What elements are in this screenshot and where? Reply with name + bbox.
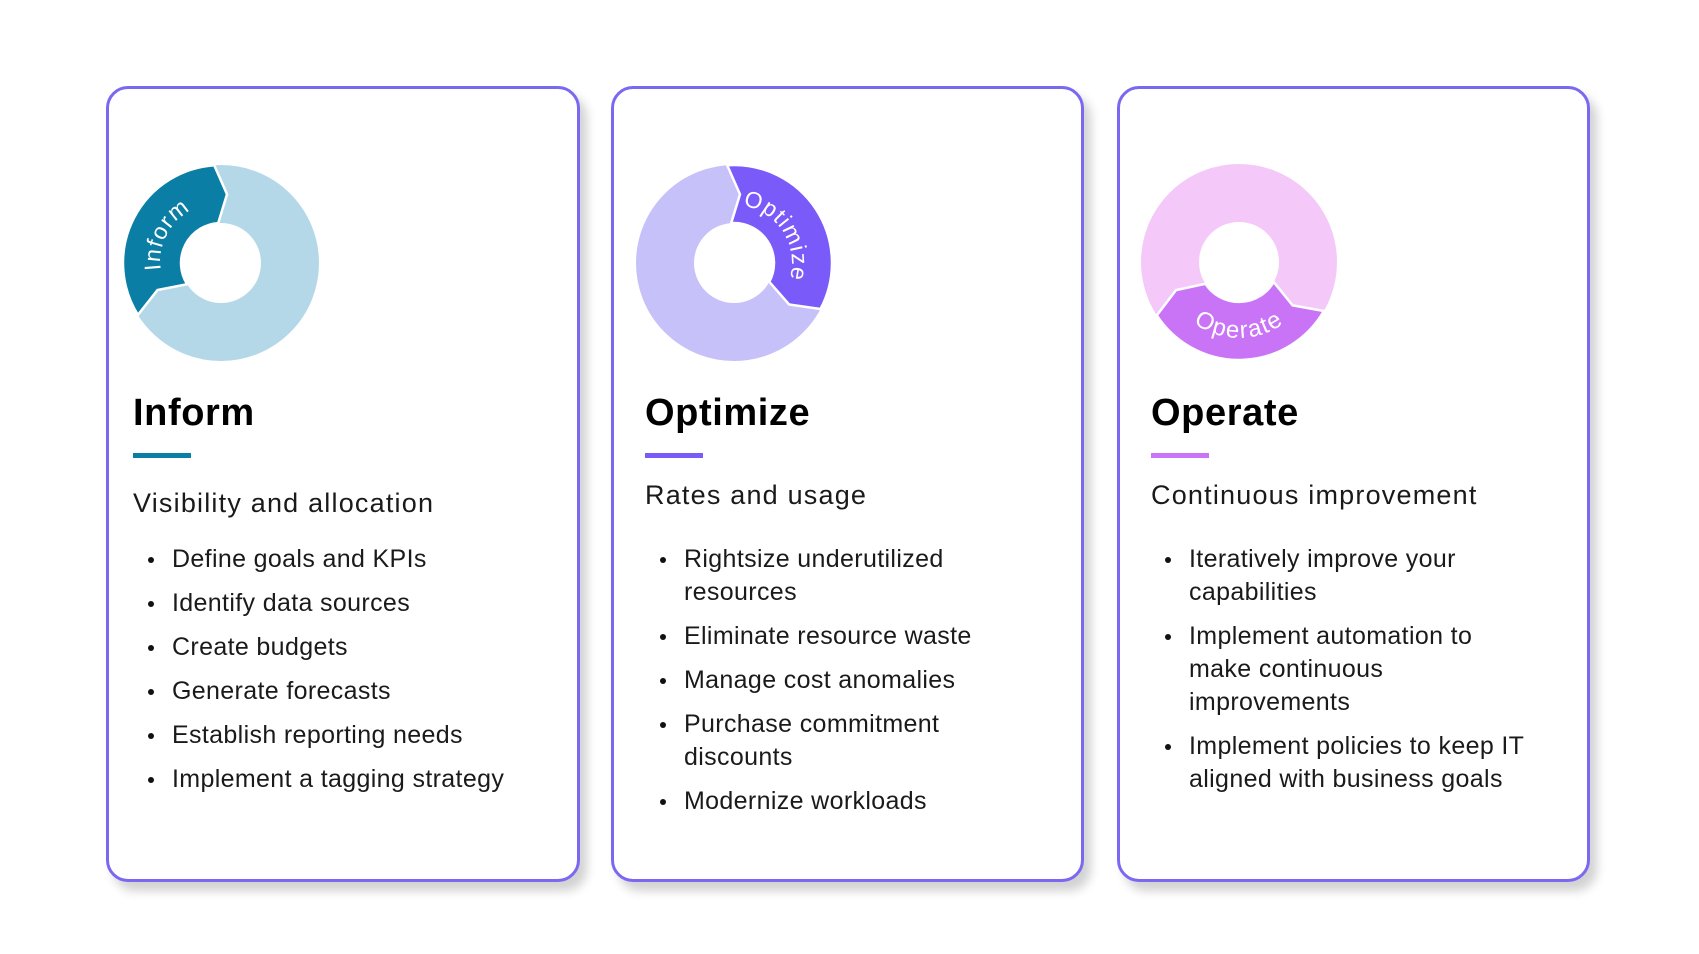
list: Optimize bullets: Rightsize underutilized — [684, 545, 944, 573]
icon: Optimize donut: Optimize — [746, 192, 807, 279]
list: Operate bullets — [1165, 545, 1524, 793]
underline: Operate — [1151, 453, 1209, 458]
underline: Optimize — [645, 453, 703, 458]
list: Optimize bullets: Eliminate resource waste — [684, 622, 972, 650]
list: Optimize bullets: Purchase commitment — [684, 710, 939, 738]
panel: Operate — [1117, 86, 1590, 882]
icon: Operate donut: Operate — [1196, 312, 1281, 339]
icon: Optimize donut — [636, 165, 831, 361]
list: Optimize bullets: Modernize workloads — [684, 787, 927, 815]
list: Inform bullets — [148, 545, 504, 793]
heading: Operate: Operate — [1151, 392, 1299, 434]
icon: Inform donut: Inform — [144, 202, 189, 270]
heading: Inform: Inform — [133, 392, 255, 434]
subtitle: Inform: Visibility and allocation — [133, 488, 434, 518]
panel: Inform — [106, 86, 580, 882]
list: Inform bullets: Identify data sources — [172, 589, 410, 617]
list: Inform bullets: Establish reporting needs — [172, 721, 463, 749]
list: Inform bullets: Implement a tagging strategy — [172, 765, 504, 793]
list: Operate bullets: Implement automation to — [1189, 622, 1472, 650]
list: Operate bullets: Implement policies to keep IT — [1189, 732, 1524, 760]
list: Operate bullets: aligned with business goals — [1189, 765, 1503, 793]
list: Optimize bullets: resources — [684, 578, 797, 606]
icon: Operate donut — [1141, 164, 1337, 359]
list: Optimize bullets: discounts — [684, 743, 793, 771]
list: Operate bullets: make continuous — [1189, 655, 1383, 683]
list: Operate bullets: capabilities — [1189, 578, 1317, 606]
icon: Inform donut — [124, 165, 319, 361]
heading: Optimize: Optimize — [645, 392, 810, 434]
underline: Inform — [133, 453, 191, 458]
subtitle: Operate: Continuous improvement — [1151, 480, 1478, 510]
list: Operate bullets: Iteratively improve your — [1189, 545, 1456, 573]
panel: Optimize — [611, 86, 1084, 882]
list: Inform bullets: Define goals and KPIs — [172, 545, 427, 573]
list: Operate bullets: improvements — [1189, 688, 1350, 716]
list: Inform bullets: Create budgets — [172, 633, 348, 661]
subtitle: Optimize: Rates and usage — [645, 480, 867, 510]
list: Inform bullets: Generate forecasts — [172, 677, 391, 705]
list: Optimize bullets: Manage cost anomalies — [684, 666, 955, 694]
list: Optimize bullets — [660, 545, 972, 815]
